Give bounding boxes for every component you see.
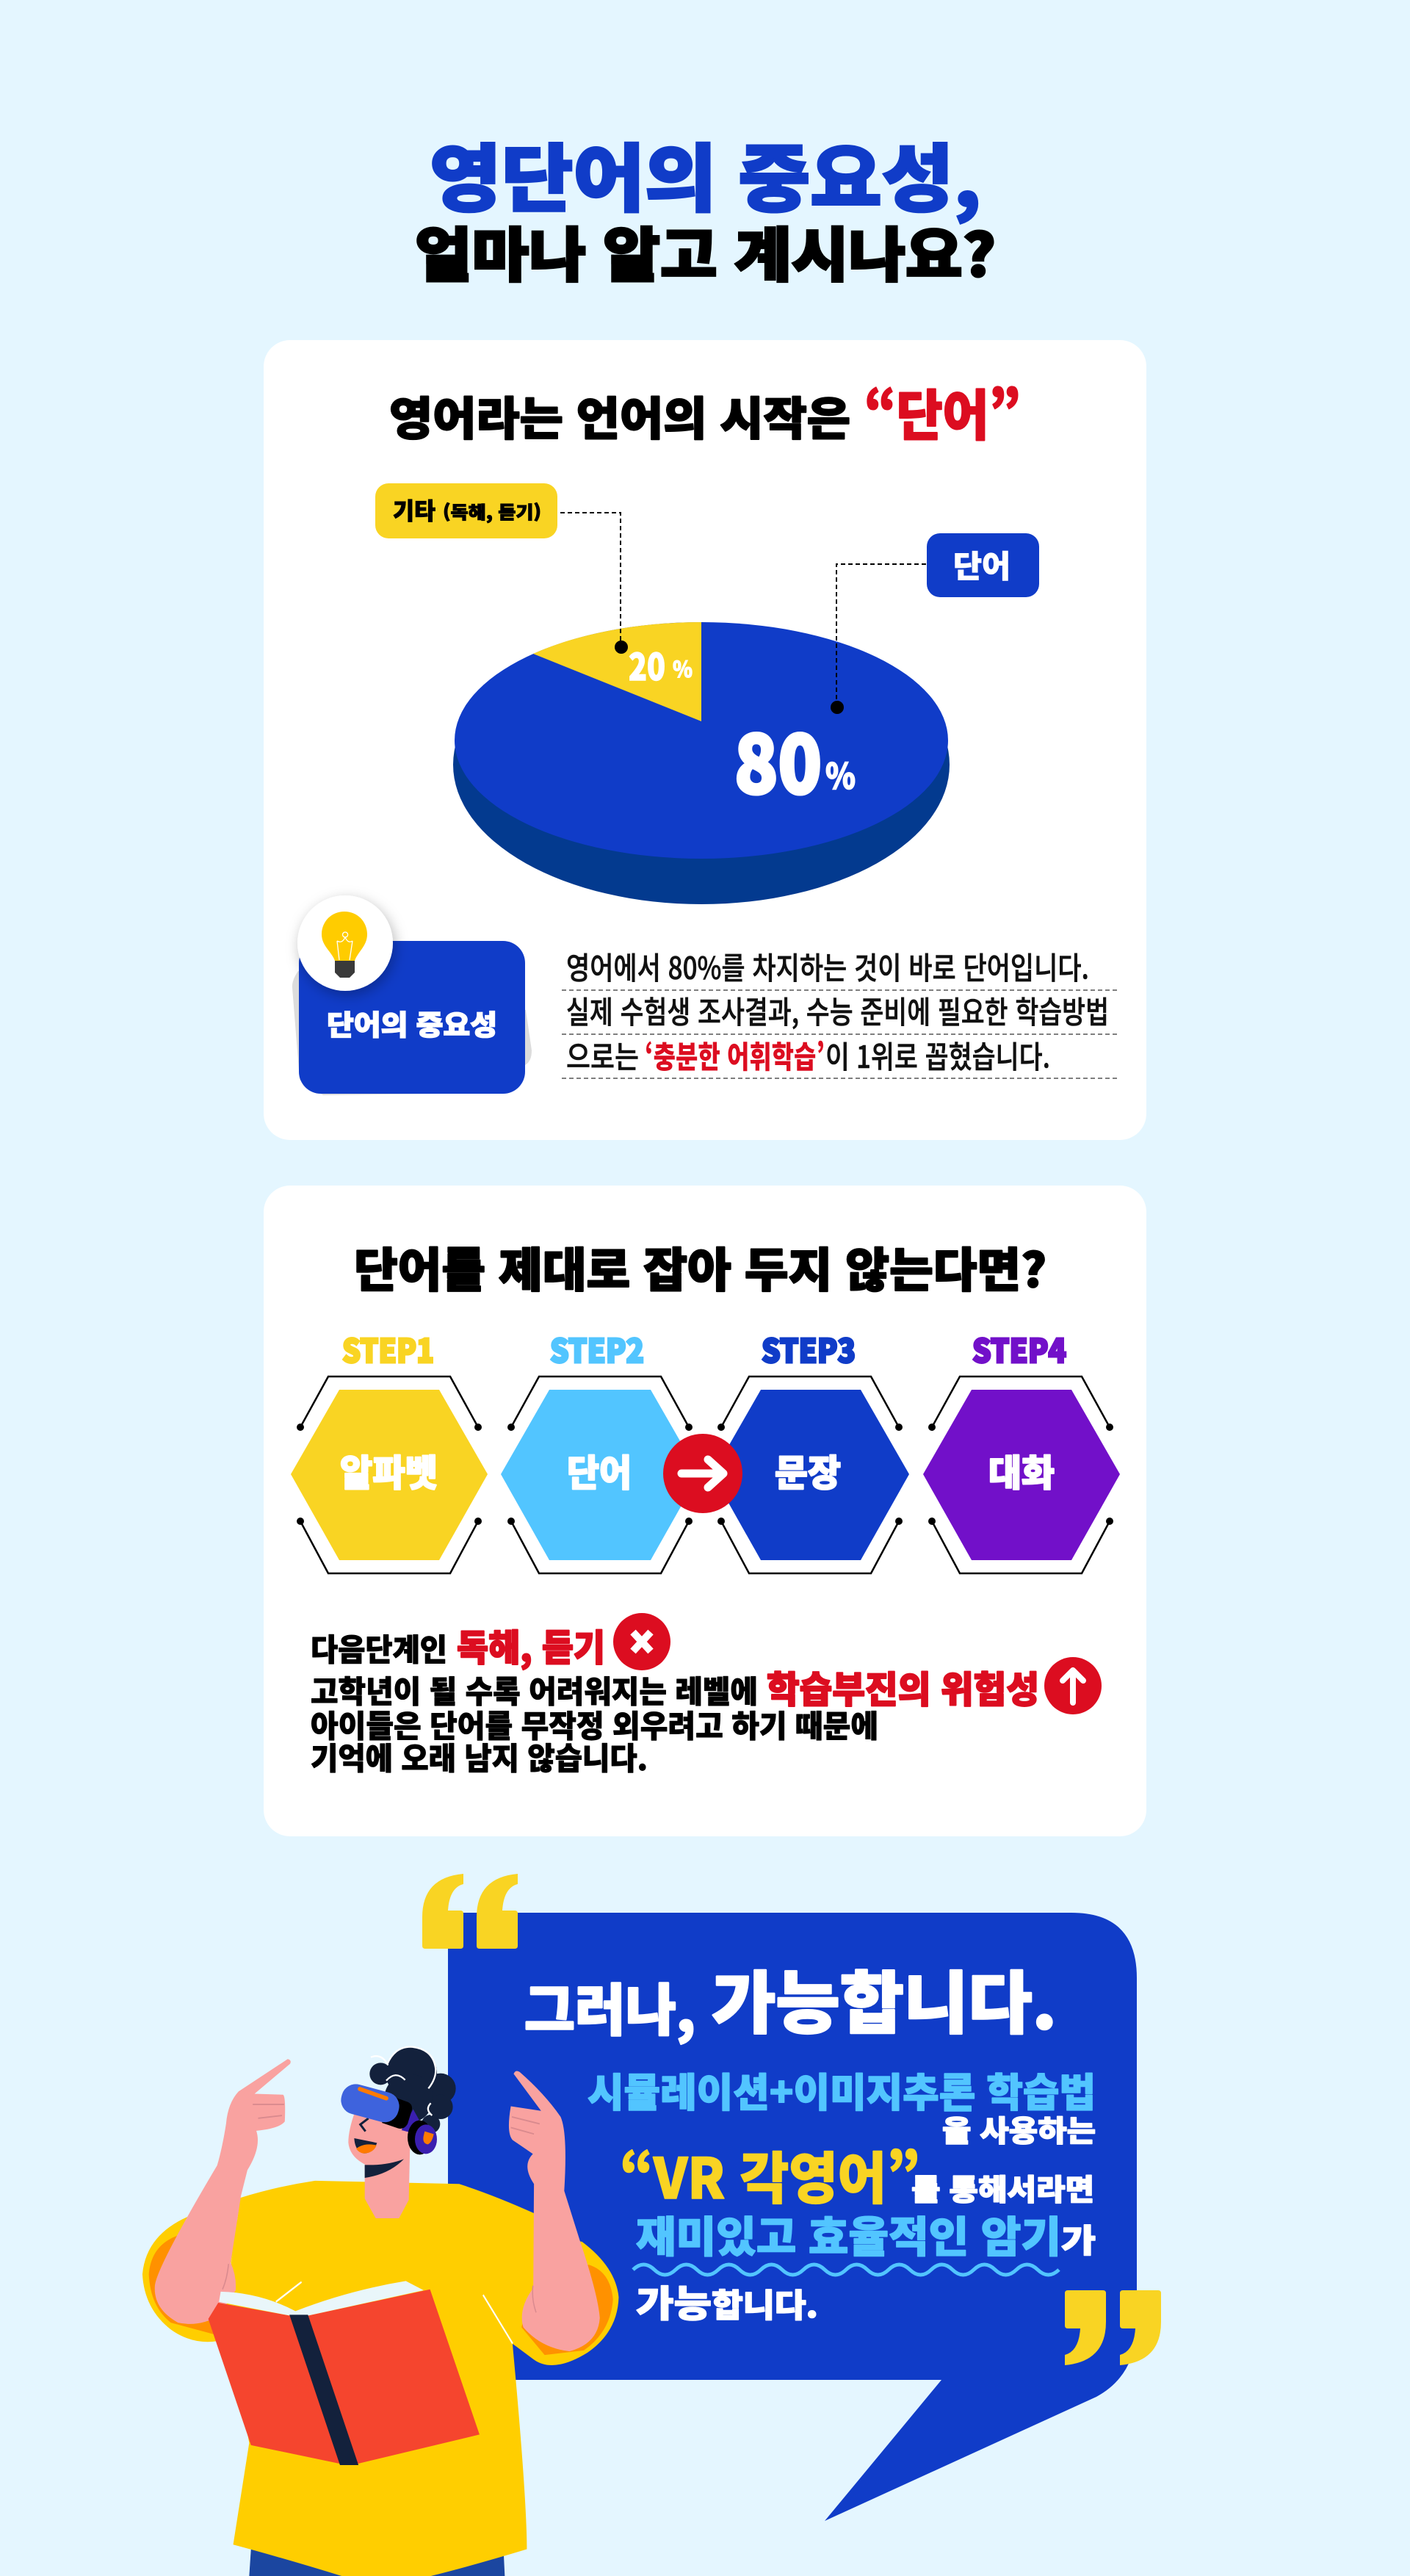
leader line: word: [831, 564, 926, 714]
label: other: (독해, 듣기): [443, 498, 541, 524]
text block: warning: [311, 1613, 1102, 1779]
pie chart: 80: [734, 702, 822, 817]
text block: warning: 기억에 오래 남지 않습니다.: [311, 1734, 648, 1779]
bubble text: 합니다.: [712, 2279, 818, 2326]
bubble text: 가능: [636, 2275, 712, 2328]
icon: x mark: [613, 1613, 670, 1670]
nose: [361, 2118, 369, 2132]
finger and arm creases: [223, 2104, 540, 2312]
label: other: [375, 483, 557, 538]
text block: warning: 학습부진의 위험성: [767, 1661, 1039, 1714]
title: 얼마나 알고 계시나요?: [415, 209, 996, 294]
icon: closing quote mark: [1065, 2290, 1161, 2365]
icon: up arrow: [1044, 1657, 1102, 1714]
pie chart: %: [825, 748, 856, 799]
book: [209, 2281, 480, 2465]
text block: explanation: 1위로 꼽혔습니다.: [856, 1033, 1050, 1078]
face: [348, 2112, 411, 2165]
text block: explanation: ‘충분한 어휘학습’: [645, 1033, 825, 1078]
panel: importance of words: [264, 340, 1146, 1140]
bubble text: “VR 각영어”: [620, 2134, 920, 2215]
illustration: person with VR headset reading a book: [142, 2047, 618, 2576]
step 1: alphabet: [291, 1325, 488, 1573]
title: [415, 120, 996, 294]
leader line: other: [560, 513, 628, 654]
shirt: [224, 2181, 541, 2576]
step 1: alphabet: STEP1: [342, 1325, 434, 1372]
shirt fold lines: [276, 2282, 513, 2343]
mouth: [354, 2138, 377, 2154]
text block: explanation: 실제 수험생 조사결과, 수능 준비에 필요한 학습방법: [566, 988, 1109, 1033]
headphones: [408, 2121, 432, 2154]
step 2: word: STEP2: [550, 1325, 644, 1372]
panel heading: 영어라는 언어의 시작은: [389, 382, 850, 448]
panel heading: “단어”: [864, 372, 1021, 451]
icon: light bulb: [322, 912, 367, 978]
bubble heading: [524, 1949, 1057, 2047]
head: [338, 2047, 456, 2218]
label: other: 기타: [393, 493, 435, 527]
text block: warning: 독해, 듣기: [457, 1619, 605, 1672]
text block: warning: 아이들은 단어를 무작정 외우려고 하기 때문에: [311, 1702, 878, 1747]
callout: importance badge: [292, 895, 532, 1095]
left sleeve: [142, 2216, 239, 2342]
right sleeve: [509, 2234, 618, 2365]
panel heading: 단어를 제대로 잡아 두지 않는다면?: [354, 1233, 1046, 1301]
bubble text: 을 사용하는: [942, 2107, 1096, 2150]
label: word: [927, 533, 1039, 597]
text block: warning: 고학년이 될 수록 어려워지는 레벨에: [311, 1667, 758, 1712]
step 1: alphabet: 알파벳: [340, 1444, 438, 1497]
beard: [365, 2159, 404, 2178]
bubble heading: 가능합니다.: [712, 1949, 1057, 2047]
title: 영단어의 중요성,: [430, 120, 981, 226]
trousers: [249, 2550, 505, 2576]
text block: explanation: 영어에서 80%를 차지하는 것이 바로 단어입니다.: [566, 944, 1089, 989]
text block: explanation: [562, 944, 1117, 1078]
bubble heading: 그러나,: [524, 1966, 695, 2046]
step 2: word: 단어: [567, 1444, 632, 1497]
hair highlights: [371, 2047, 435, 2115]
text block: explanation: 이: [825, 1033, 850, 1078]
neck: [365, 2145, 410, 2218]
callout: importance badge: 단어의 중요성: [327, 1003, 497, 1043]
icon: opening quote mark: [422, 1874, 518, 1949]
bubble text: 를 통해서라면: [911, 2166, 1094, 2209]
label: word: 단어: [953, 542, 1010, 587]
VR visor: [338, 2081, 402, 2126]
step 4: conversation: 대화: [988, 1444, 1055, 1497]
arrow: step 2 to step 3: [663, 1434, 742, 1513]
bubble text: 재미있고 효율적인 암기: [636, 2203, 1061, 2265]
bubble text: 시뮬레이션+이미지추론 학습법: [588, 2060, 1096, 2118]
right arm and hand: [509, 2071, 600, 2351]
text block: warning: 다음단계인: [311, 1626, 447, 1670]
panel: steps: [264, 1186, 1146, 1836]
step 4: conversation: STEP4: [972, 1325, 1066, 1372]
step 4: conversation: [923, 1325, 1120, 1573]
speech bubble: [448, 1913, 1137, 2521]
left arm and hand: [155, 2059, 291, 2324]
pie chart: [453, 622, 950, 904]
pie chart: %: [673, 652, 693, 684]
panel heading: [389, 372, 1021, 451]
bubble text: [588, 2060, 1096, 2328]
bubble text: 가: [1061, 2215, 1096, 2262]
pie chart: 20: [629, 638, 665, 691]
step 2: word: [501, 1325, 699, 1573]
hair: [369, 2047, 456, 2133]
text block: explanation: 으로는: [566, 1033, 639, 1078]
step 3: sentence: 문장: [775, 1444, 841, 1497]
headset strap: [402, 2110, 419, 2132]
step 3: sentence: STEP3: [762, 1325, 856, 1372]
step 3: sentence: [712, 1325, 909, 1573]
